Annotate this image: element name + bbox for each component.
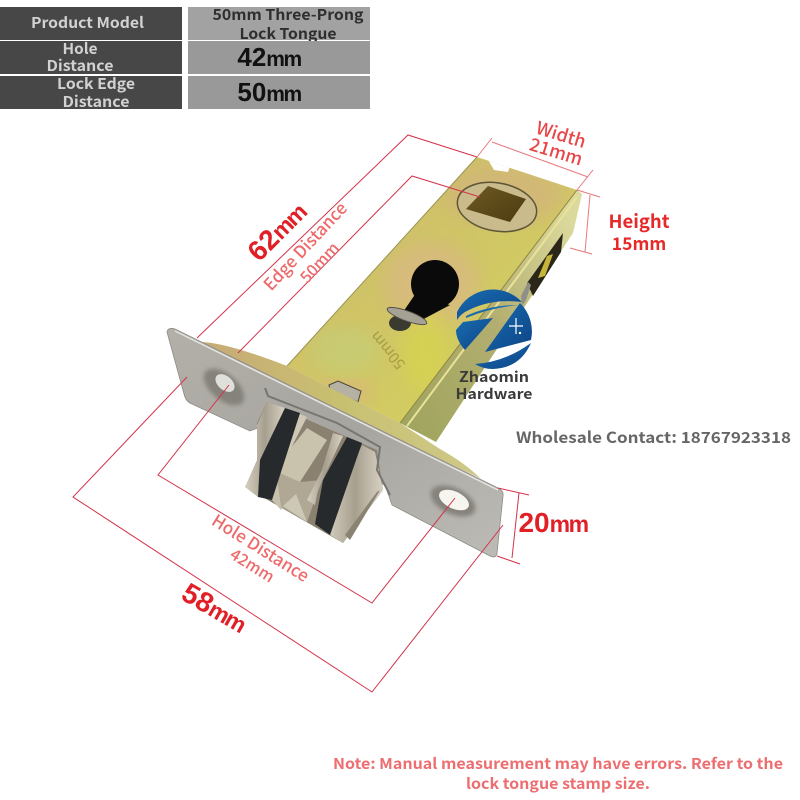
row: lock edge distance label	[0, 73, 182, 112]
row: lock edge distance label: Distance	[62, 91, 130, 112]
width dimension line	[477, 138, 593, 190]
base slot on body	[329, 381, 361, 402]
row: lock edge distance label: Lock Edge	[57, 73, 135, 94]
edge distance line	[238, 176, 480, 353]
label: width: Width	[533, 114, 589, 154]
row: product model label: Product Model	[31, 12, 144, 33]
latch front face	[287, 157, 577, 423]
label: 15mm: 15mm	[612, 231, 666, 256]
label: hole 42mm: 42mm	[226, 541, 280, 587]
logo text: Zhaomin	[459, 366, 529, 387]
label: 21mm: 21mm	[526, 131, 586, 171]
keyhole	[386, 260, 459, 331]
row: product model label	[0, 7, 182, 40]
row: hole distance value	[188, 41, 370, 74]
right lobe	[307, 433, 343, 505]
centre block	[273, 428, 327, 482]
spec table	[0, 4, 370, 112]
label: edge distance: Edge Distance	[257, 195, 352, 295]
engraved size stamp: 50mm	[365, 327, 410, 374]
far right lobe	[327, 445, 383, 543]
label: 62mm: 62mm	[241, 196, 313, 267]
mortise latch photo illustration	[167, 157, 582, 557]
row: product model value	[188, 4, 370, 44]
latch top strip behind plate	[200, 342, 480, 478]
row: hole distance label: Hole	[62, 38, 98, 59]
note: Note: Manual measurement may have errors. Refer to the	[333, 753, 783, 774]
hole distance line	[158, 385, 455, 603]
logo text	[456, 366, 532, 404]
row: product model value: Lock Tongue	[240, 23, 337, 44]
note	[333, 753, 783, 794]
logo: Zhaomin Hardware	[456, 290, 532, 369]
label: 20mm: 20mm	[518, 507, 589, 538]
wholesale contact: Wholesale Contact: 18767923318	[516, 426, 791, 448]
logo text: Hardware	[456, 383, 532, 404]
middle lobe	[275, 414, 307, 468]
label: hole distance: Hole Distance	[208, 507, 315, 587]
lower wedge	[276, 470, 322, 522]
label: edge 50mm: 50mm	[293, 236, 344, 288]
cutout outline	[265, 388, 390, 495]
faceplate	[167, 328, 503, 557]
height dimension line	[570, 190, 600, 254]
screw holes	[197, 362, 251, 412]
row: hole distance label: Distance	[46, 55, 114, 76]
label: 58mm: 58mm	[177, 577, 253, 639]
note: lock tongue stamp size.	[466, 773, 650, 794]
row: lock edge distance value: 50mm	[237, 77, 301, 107]
row: product model value: 50mm Three-Prong	[212, 4, 364, 25]
square spindle hole	[453, 176, 541, 238]
20mm dimension line	[497, 488, 529, 564]
row: hole distance label	[0, 38, 182, 76]
label: height: Height	[608, 208, 670, 234]
latch side face	[400, 190, 582, 442]
side slot	[527, 233, 563, 296]
62mm dimension line	[197, 135, 477, 338]
dimension lines	[73, 135, 600, 692]
left curl	[245, 402, 285, 497]
rubber band left	[258, 408, 300, 500]
row: lock edge distance value	[188, 76, 370, 109]
row: hole distance value: 42mm	[237, 42, 301, 72]
58mm dimension line	[73, 377, 503, 692]
tongue	[245, 402, 383, 543]
rubber band right	[315, 437, 362, 535]
